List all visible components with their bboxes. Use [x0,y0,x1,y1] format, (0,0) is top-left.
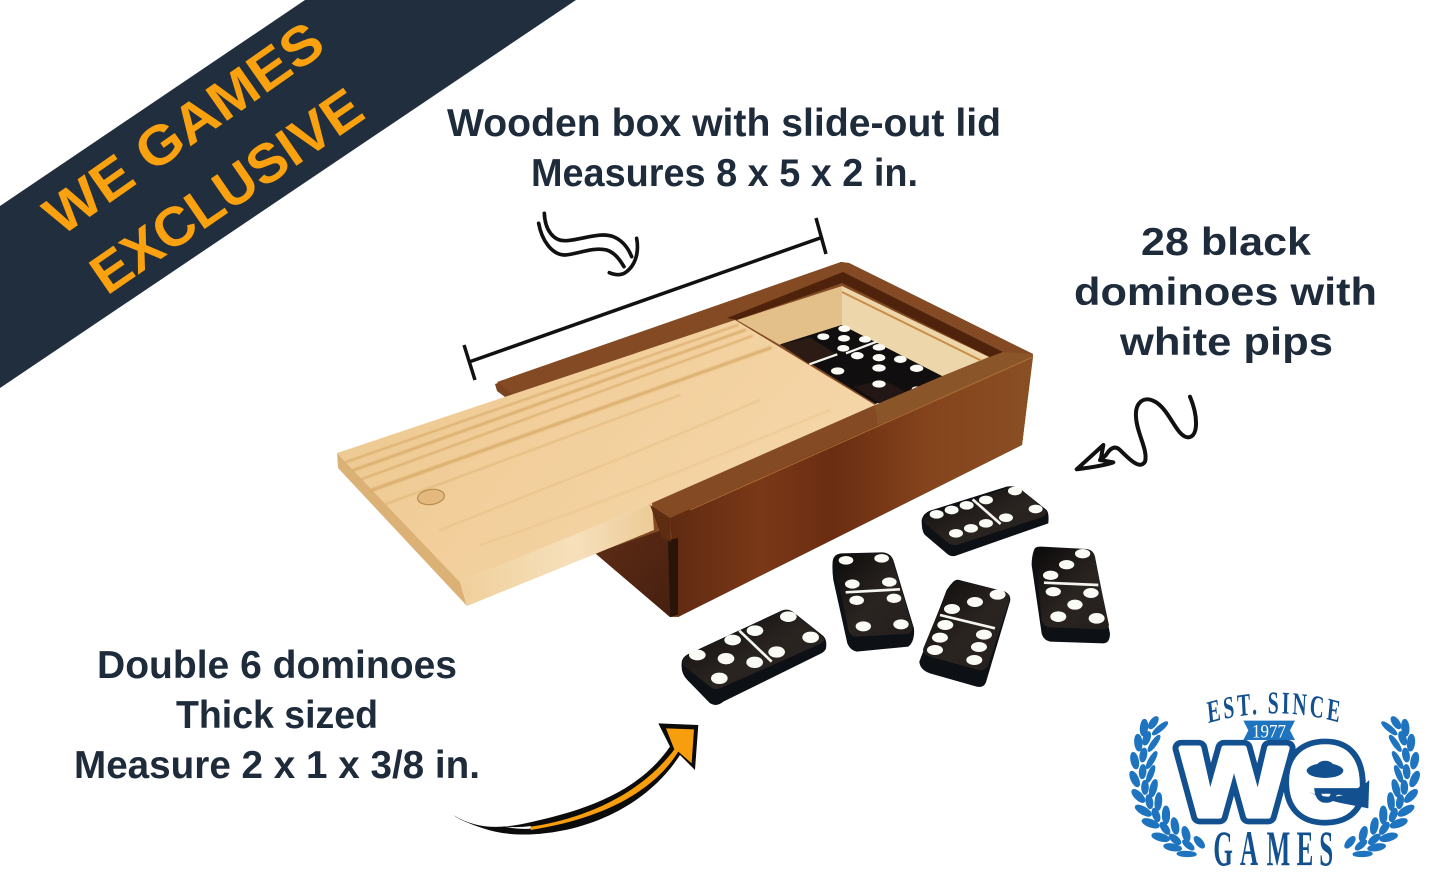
heading: black dominoes caption: dominoes with [1074,271,1377,314]
logo ribbon: 1977: 1977 [1252,721,1286,742]
box end face [595,528,670,617]
banner text: EXCLUSIVE: EXCLUSIVE [79,76,374,306]
domino: 3-5 far right [1032,547,1110,643]
icon: squiggle arrow pointing at box [539,213,637,275]
box rim front top [875,352,1033,426]
icon: curved orange arrow [453,723,698,835]
lid finger hole [417,488,445,506]
logo text: GAMES: GAMES [1213,821,1333,876]
inner dark rim [727,272,1003,357]
lid left side edge [337,453,467,606]
lid wood grain [346,325,830,545]
logo wordmark: we: we [1181,701,1362,844]
heading: black dominoes caption: 28 black [1141,221,1311,264]
heading: double 6 dominoes caption: Double 6 dominoes [97,644,457,687]
logo laurel wreath right [1343,715,1421,857]
domino: 6-3 top right [922,486,1049,556]
heading: double 6 dominoes caption: Thick sized [176,694,378,737]
heading: black dominoes caption [1074,221,1377,364]
logo arc text: EST. SINCE [1206,692,1340,723]
logo wordmark: we: we [1181,701,1362,844]
logo arc text: EST. SINCE: EST. SINCE [1206,692,1340,723]
domino: 3-6 centre [919,580,1010,687]
heading: double 6 dominoes caption [74,644,480,787]
interior right wall [842,286,989,377]
banner: diagonal corner ribbon [0,0,576,388]
loose dominoes [682,486,1110,705]
logo: WE Games est. since 1977 [1129,692,1420,876]
box silhouette and rim [495,262,1033,617]
domino: 4-5 bottom left [682,610,826,705]
heading: wooden box caption [447,102,1001,195]
heading: double 6 dominoes caption: Measure 2 x 1 x 3/8 in. [74,744,480,787]
icon: dimension line [464,218,826,380]
dominoes inside box [780,325,943,407]
icon: squiggle arrow pointing at dominoes [1077,397,1196,469]
heading: wooden box caption: Measures 8 x 5 x 2 in. [531,152,918,195]
heading: wooden box caption: Wooden box with slide-out lid [447,102,1001,145]
interior back wall [737,286,842,345]
banner text: WE GAMES: WE GAMES [32,9,335,247]
logo laurel wreath left [1128,715,1206,857]
wooden box with slide-out lid [337,262,1033,617]
lid top [337,320,875,582]
heading: black dominoes caption: white pips [1119,321,1333,364]
box front left post [650,505,671,542]
domino: 2-4 centre left [832,552,914,652]
lid front side edge [460,503,654,606]
box front face [670,357,1033,617]
